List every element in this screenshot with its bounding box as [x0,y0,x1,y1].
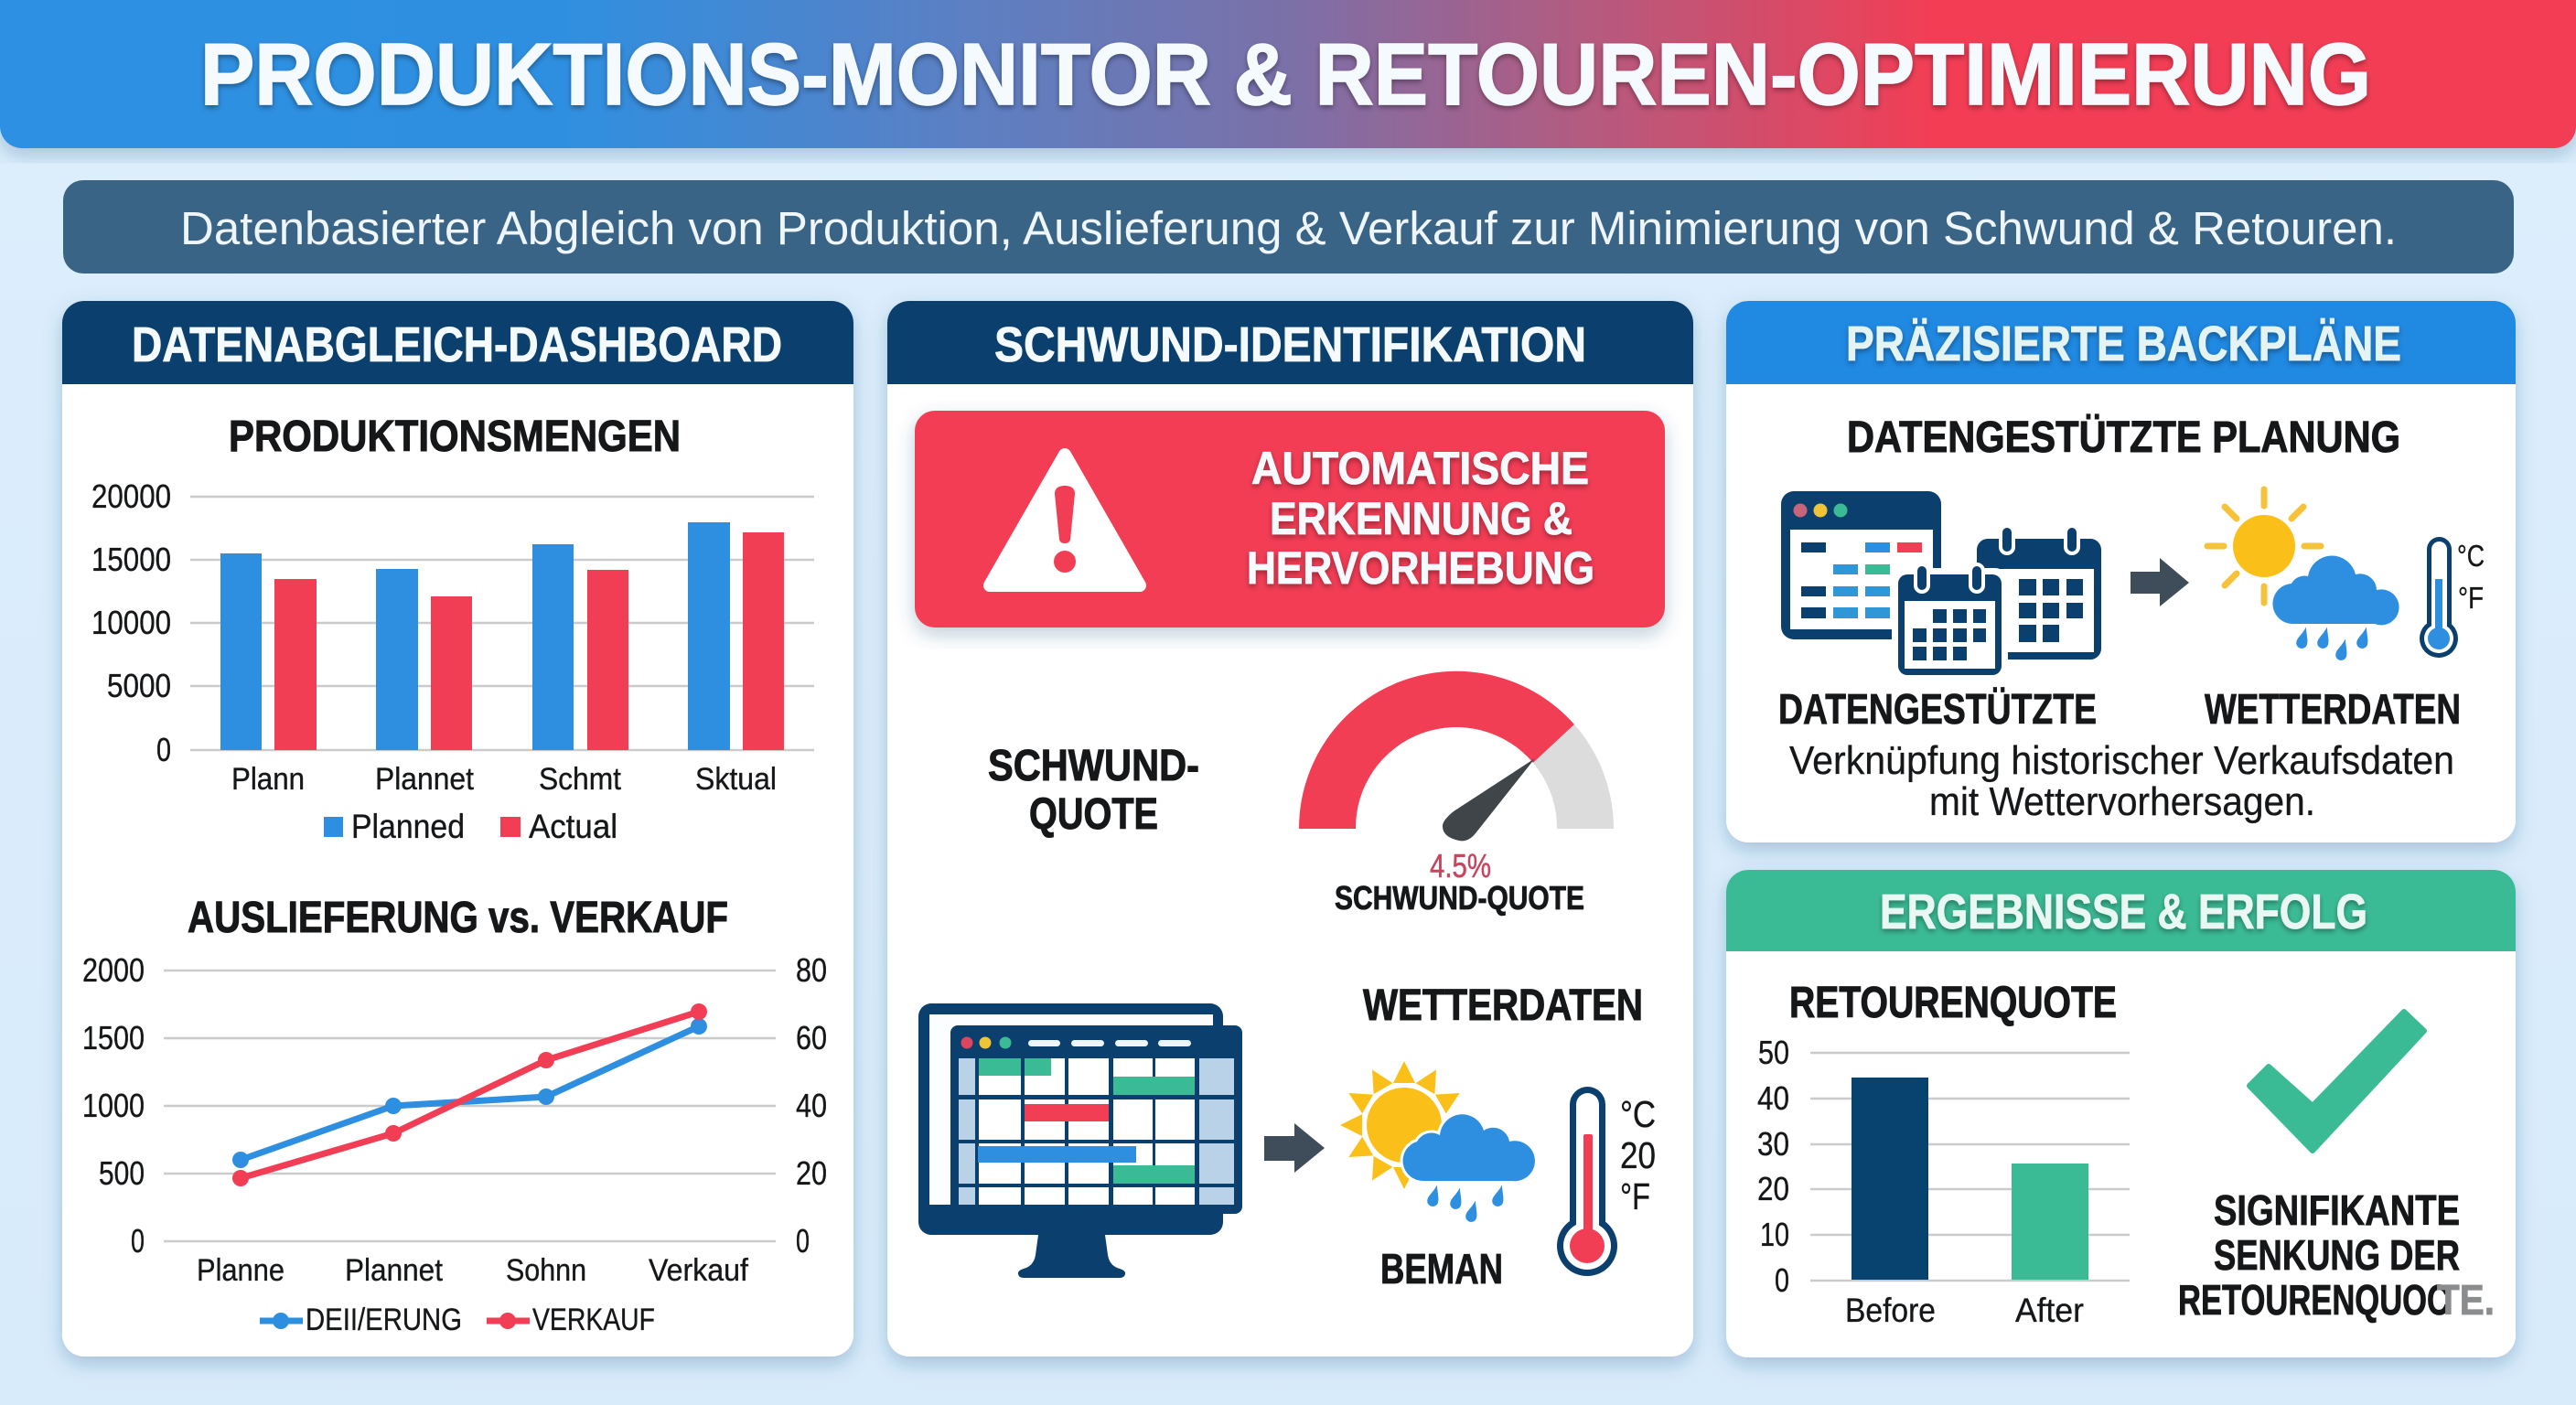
chart legend: Actual [529,808,617,845]
line chart: Auslieferung vs. Verkauf: 20 [796,1154,827,1192]
bar chart: Retourenquote [1757,1034,2130,1329]
gauge: Schwund-Quote: 4.5% [1430,847,1491,885]
panel header: ERGEBNISSE & ERFOLG [1880,885,2367,939]
label: Schwund-Quote [988,742,1199,839]
icon: thermometer [2420,537,2458,658]
bar chart: Produktionsmengen: 10000 [91,604,171,641]
bar chart: Produktionsmengen: 5000 [107,667,171,704]
icon: sun and rain cloud [2207,489,2399,661]
label: Wetterdaten: WETTERDATEN [2205,685,2461,733]
panel header: DATENABGLEICH-DASHBOARD [132,317,782,372]
alert box [915,411,1665,627]
bar chart: Produktionsmengen: 15000 [91,541,171,578]
line chart: Auslieferung vs. Verkauf: Plannet [345,1253,444,1288]
panel header [62,301,853,384]
panel header [1726,301,2516,384]
bar chart: Produktionsmengen: Schmt [539,762,622,797]
heading: Datengestützte Planung: DATENGESTÜTZTE PLANUNG [1847,413,2400,462]
line chart: Auslieferung vs. Verkauf: 500 [99,1154,145,1192]
line chart: Auslieferung vs. Verkauf: Sohnn [506,1253,586,1288]
gauge: Schwund-Quote: SCHWUND-QUOTE [1335,879,1584,917]
subtitle bar: Datenbasierter Abgleich von Produktion, Auslieferung & Verkauf zur Minimierung von Schwund & Retouren. [180,202,2397,254]
label: Datengestützte: DATENGESTÜTZTE [1778,685,2097,733]
temperature labels [1620,1093,1656,1217]
panel: Datenabgleich-Dashboard [62,301,853,1357]
panel header [1726,870,2516,951]
bar chart: Produktionsmengen: 20000 [91,477,171,515]
alert text: AUTOMATISCHE [1251,443,1589,494]
temperature labels: °C [1620,1093,1656,1135]
line chart: Auslieferung vs. Verkauf [82,951,827,1337]
bar chart: Produktionsmengen: Sktual [695,762,777,797]
line chart: Auslieferung vs. Verkauf: 0 [796,1222,810,1260]
line chart: Auslieferung vs. Verkauf: 1500 [82,1019,145,1056]
subtitle bar [63,180,2514,273]
line chart: Auslieferung vs. Verkauf: 40 [796,1087,827,1124]
bar chart: Retourenquote: 40 [1757,1079,1789,1117]
line chart: Auslieferung vs. Verkauf: Planne [197,1253,284,1288]
bar chart: Produktionsmengen: 0 [156,731,171,768]
temperature labels [2457,539,2485,615]
panel: Ergebnisse & Erfolg [1726,870,2516,1357]
label: Schwund-Quote: SCHWUND- [988,742,1199,790]
temperature labels: °C [2457,539,2485,573]
bar chart: Produktionsmengen: Plann [231,762,305,797]
panel: Schwund-Identifikation [887,301,1693,1357]
icon: large calendar [1977,526,2101,660]
label: Beman: BEMAN [1380,1245,1503,1292]
line chart: Auslieferung vs. Verkauf: 60 [796,1019,827,1056]
description text [1789,738,2454,824]
heading: Produktionsmengen: PRODUKTIONSMENGEN [229,413,681,461]
description text: Verknüpfung historischer Verkaufsdaten [1789,738,2454,783]
heading: Auslieferung vs. Verkauf: AUSLIEFERUNG vs. VERKAUF [188,894,728,942]
line chart: Auslieferung vs. Verkauf: 1000 [82,1087,145,1124]
heading: Retourenquote: RETOURENQUOTE [1789,979,2117,1027]
alert text: HERVORHEBUNG [1247,542,1594,594]
panel: Präzisierte Backpläne [1726,301,2516,842]
series: Auslieferung [232,1018,707,1168]
bar chart: Retourenquote: 0 [1775,1261,1789,1299]
bar chart: Retourenquote: 20 [1757,1170,1789,1207]
panel header: PRÄZISIERTE BACKPLÄNE [1846,316,2401,371]
chart legend [324,808,617,845]
panel header: SCHWUND-IDENTIFIKATION [994,317,1586,372]
icon: warning triangle [990,455,1140,585]
arrow [2131,558,2189,606]
description text: mit Wettervorhersagen. [1929,779,2315,824]
gauge: Schwund-Quote [1299,671,1614,917]
bar chart: Retourenquote: 30 [1757,1125,1789,1163]
result text: SIGNIFIKANTE [2214,1186,2460,1234]
chart legend: DEII/ERUNG [306,1303,462,1337]
temperature labels: °F [1620,1175,1650,1217]
label: Schwund-Quote: QUOTE [1029,790,1158,839]
icon: sun and rain cloud [1340,1061,1535,1223]
alert text: ERKENNUNG & [1270,493,1572,544]
icon: monitor with schedule [918,1003,1242,1278]
icon: small calendar [1892,564,2008,681]
result text: RETOURENQUOC [2178,1276,2450,1324]
icon: thermometer [1557,1087,1617,1276]
line chart: Auslieferung vs. Verkauf: Verkauf [649,1253,749,1288]
chart legend: Planned [351,808,465,845]
chart legend: VERKAUF [532,1303,655,1337]
bar chart: Produktionsmengen: Plannet [375,762,475,797]
arrow [1264,1123,1325,1173]
heading: Wetterdaten: WETTERDATEN [1363,981,1643,1030]
line chart: Auslieferung vs. Verkauf: 80 [796,951,827,989]
result text: SENKUNG DER [2214,1231,2460,1279]
temperature labels: °F [2458,581,2484,615]
bar chart: Retourenquote: After [2015,1292,2084,1329]
result text [2178,1186,2495,1324]
line chart: Auslieferung vs. Verkauf: 0 [131,1222,145,1260]
alert text [1247,443,1594,594]
result text: TE. [2437,1276,2495,1324]
title: PRODUKTIONS-MONITOR & RETOUREN-OPTIMIERUNG [200,26,2371,123]
title banner [0,0,2576,148]
icon: check mark [2249,1012,2424,1151]
bar chart: Retourenquote: 10 [1760,1216,1789,1253]
panel header [887,301,1693,384]
series: Verkauf [232,1003,707,1186]
temperature labels: 20 [1620,1134,1656,1176]
bar chart: Retourenquote: 50 [1758,1034,1789,1071]
chart legend [260,1303,655,1337]
bar chart: Retourenquote: Before [1845,1292,1936,1329]
line chart: Auslieferung vs. Verkauf: 2000 [82,951,145,989]
icon: data window [1781,491,1941,639]
bar chart: Produktionsmengen [91,477,814,845]
